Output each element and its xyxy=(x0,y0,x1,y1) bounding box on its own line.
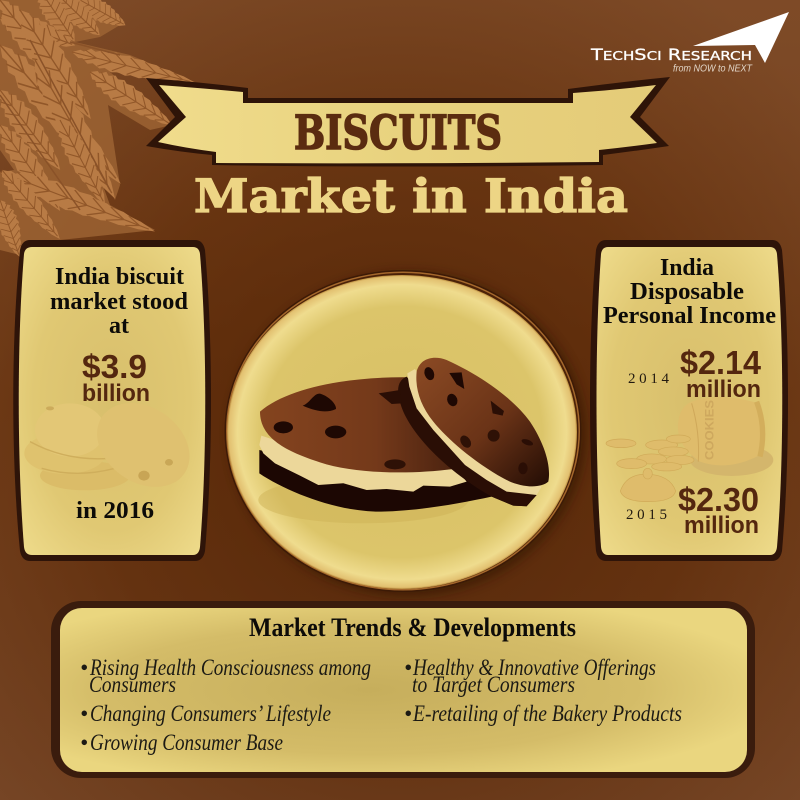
panel frame xyxy=(13,240,211,561)
panel: market trends xyxy=(51,601,755,778)
panel heading: at xyxy=(109,313,129,339)
bullet list: right column: • xyxy=(404,655,412,680)
logo wordmark: TECH SCI R ESEARCH xyxy=(590,45,752,64)
stat: 2015: million xyxy=(684,512,759,539)
bullet list: left column: Growing Consumer Base xyxy=(90,730,283,755)
heading: BISCUITS: BISCUITS xyxy=(294,106,502,161)
panel heading: Market Trends & Developments xyxy=(249,613,576,642)
logo tagline: from NOW to NEXT xyxy=(673,62,753,74)
icon: sandwich cookies xyxy=(258,358,549,523)
panel heading: India xyxy=(660,255,714,281)
stat: 2015 xyxy=(626,481,759,539)
panel heading: market stood xyxy=(50,289,189,315)
stat: 2014: $2.14 xyxy=(680,344,762,381)
bullet list: left column: • xyxy=(80,701,88,726)
bullet list: left column: • xyxy=(80,655,88,680)
bullet list: left column: Changing Consumers’ Lifestyle xyxy=(90,701,331,726)
centre disc with cookie illustration xyxy=(224,270,586,596)
stat: 2015: $2.30 xyxy=(678,481,759,518)
panel frame xyxy=(590,240,788,561)
bullet list: left column: Rising Health Consciousness among xyxy=(89,655,371,680)
ribbon shape xyxy=(146,77,670,166)
year label: in 2016 xyxy=(76,498,154,524)
watermark: cookie jar: COOKIES xyxy=(703,400,717,460)
panel heading xyxy=(603,255,776,329)
stat: 3.9 billion xyxy=(82,348,150,407)
panel heading: India biscuit xyxy=(55,264,184,290)
bullet list: left column: • xyxy=(80,730,88,755)
bullet list: left column xyxy=(80,655,371,755)
icon: paper plane xyxy=(693,12,789,63)
stat: 3.9 billion: $3.9 xyxy=(82,348,147,385)
bullet list: right column: E-retailing of the Bakery Products xyxy=(412,701,682,726)
bullet list: left column: Consumers xyxy=(89,672,176,697)
stat: 2014 xyxy=(628,344,762,403)
bullet list: right column: Healthy & Innovative Offerings xyxy=(412,655,656,680)
wheat stalks decoration xyxy=(0,0,198,260)
panel heading: Personal Income xyxy=(603,303,776,329)
bullet list: right column: • xyxy=(404,701,412,726)
panel: disposable income xyxy=(590,240,788,561)
panel heading xyxy=(50,264,189,339)
stat: 3.9 billion: billion xyxy=(82,380,150,407)
bullet list: right column: to Target Consumers xyxy=(412,672,575,697)
panel: market size xyxy=(13,240,211,561)
watermark: cookie jar xyxy=(606,397,773,502)
stat: 2014: million xyxy=(686,376,761,403)
logo: TechSci Research xyxy=(590,12,789,74)
subtitle: Market in India xyxy=(194,169,628,223)
title ribbon xyxy=(146,77,670,166)
stat: 2015: 2015 xyxy=(626,507,667,523)
disc xyxy=(224,270,586,596)
panel frame xyxy=(51,601,755,778)
panel heading: Disposable xyxy=(630,279,744,305)
watermark: biscuits xyxy=(24,386,206,504)
bullet list: right column xyxy=(404,655,682,726)
stat: 2014: 2014 xyxy=(628,371,670,387)
